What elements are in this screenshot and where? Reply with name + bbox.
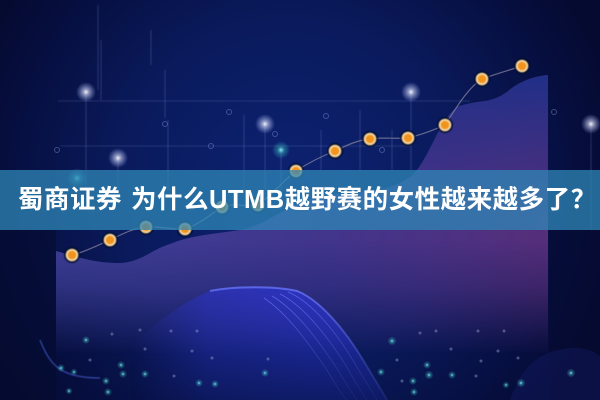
chart baseline [55,359,548,361]
right corner wave [510,348,600,400]
data line [72,66,522,255]
grid and light posts [58,5,591,230]
marker halos [64,58,530,263]
mesh wave lines [210,287,387,400]
area chart [56,75,548,360]
data markers [67,61,527,260]
left corner arc [40,340,100,378]
area chart right edge [546,60,548,360]
title: 蜀商证券 为什么UTMB越野赛的女性越来越多了？ [18,186,597,214]
glowing nodes [67,82,600,188]
title banner [0,170,600,230]
mesh wave [130,287,387,400]
dark left and right edges [0,230,600,400]
grey particle dots [88,328,520,382]
small ring nodes [54,110,556,152]
teal particle dots [57,336,576,396]
